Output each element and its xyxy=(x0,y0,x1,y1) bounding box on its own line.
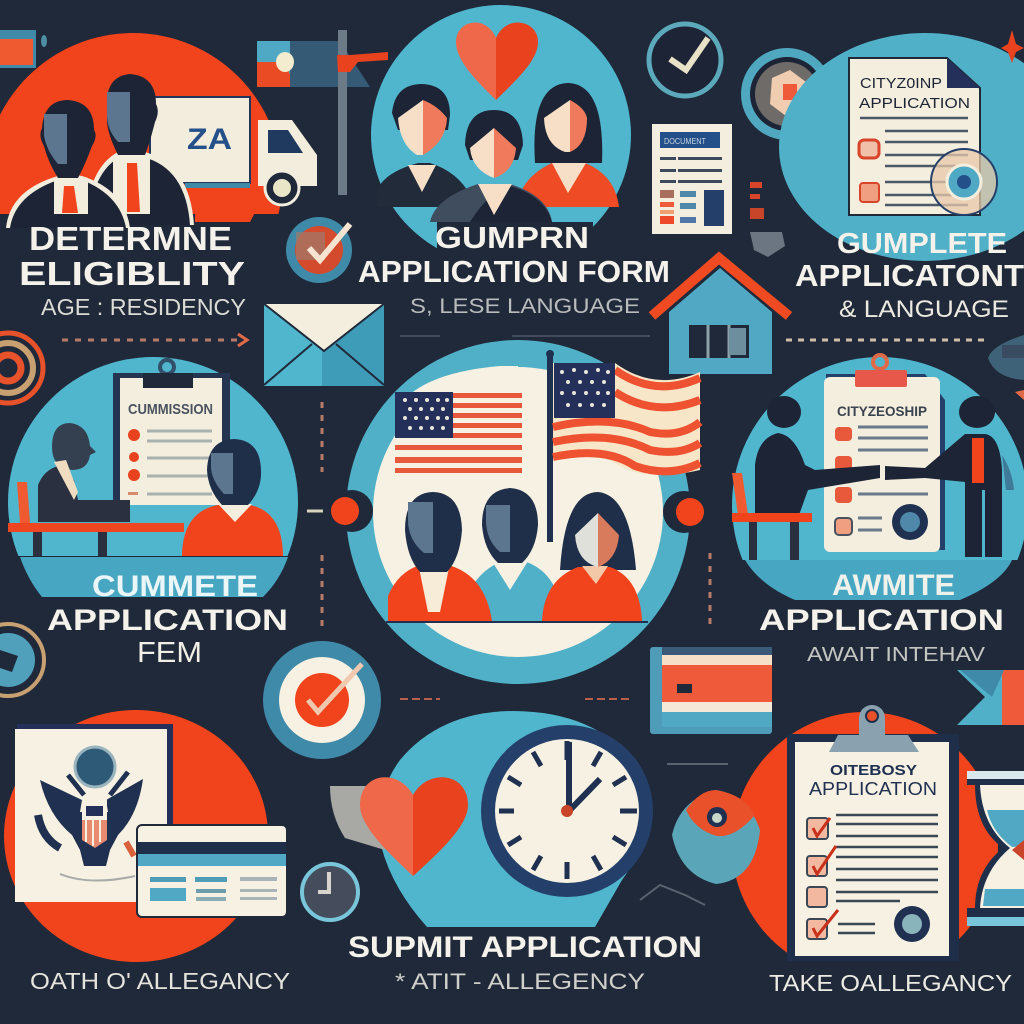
heading: submit application: SUPMIT APPLICATION xyxy=(348,931,702,964)
icon: person right xyxy=(517,83,619,207)
panel: await application xyxy=(720,355,1024,700)
icon: citizen centre xyxy=(470,488,556,621)
icon: clipboard xyxy=(787,705,959,961)
icon: seated official xyxy=(38,423,130,522)
icon: waving flag xyxy=(546,350,700,542)
icon: key and flag xyxy=(257,30,388,195)
icon: node left xyxy=(331,490,373,532)
icon: approved check badge xyxy=(286,217,352,283)
heading: awmite: AWMITE xyxy=(832,569,955,602)
icon: right side bust xyxy=(988,335,1024,400)
panel: complete application circle xyxy=(779,30,1024,323)
panel: take oath xyxy=(672,705,1024,996)
icon: person shaking hands right xyxy=(885,396,1014,557)
heading: gumprn: GUMPRN xyxy=(435,220,589,255)
icon: round stamp xyxy=(741,48,833,140)
arrows: dashed connectors xyxy=(62,334,985,699)
icon: smear xyxy=(330,786,385,850)
icon: id card xyxy=(650,647,772,734)
icon: small marks xyxy=(750,182,785,257)
icon: small clock badge xyxy=(302,864,358,920)
icon: person left xyxy=(377,84,470,207)
caption: AGE : RESIDENCY xyxy=(41,294,246,320)
icon: clipboard: OITEBOSY xyxy=(830,762,917,779)
heading line 2: APPLICATONT xyxy=(795,258,1024,293)
icon: left partial badge xyxy=(0,624,44,696)
panel: central flag and citizens xyxy=(346,340,700,684)
icon: bank card xyxy=(137,825,287,917)
panel: complete application form xyxy=(0,357,310,700)
icon: corner ticket xyxy=(0,30,47,68)
panel: determine eligibility xyxy=(0,33,317,331)
caption: * ATIT - ALLEGENCY xyxy=(395,969,645,994)
caption: S, LESE LANGUAGE xyxy=(410,295,640,318)
icon: two officials xyxy=(6,74,194,228)
icon: location pin xyxy=(672,790,760,884)
panel: application form circle xyxy=(358,5,670,318)
icon: star xyxy=(1001,30,1024,63)
icon: citizen right xyxy=(542,492,642,621)
icon: clock xyxy=(481,725,653,897)
caption: oath of allegiance: OATH O' ALLEGANCY xyxy=(30,968,290,994)
icon: sketch marks xyxy=(640,764,728,905)
icon: left target xyxy=(0,333,43,403)
icon: chair xyxy=(732,473,812,522)
icon: node right xyxy=(663,491,705,533)
heading: cummete: CUMMETE xyxy=(92,570,258,603)
icon: clipboard xyxy=(113,360,230,505)
icon: person centre xyxy=(430,110,552,222)
heading line 2: ELIGIBLITY xyxy=(19,255,245,292)
icon: document xyxy=(652,124,732,234)
icon: small flag xyxy=(395,392,522,473)
caption: take oath: TAKE OALLEGANCY xyxy=(769,970,1012,996)
caption: AWAIT INTEHAV xyxy=(807,644,986,666)
icon: seated applicant xyxy=(182,439,283,557)
icon: seal document xyxy=(15,724,173,902)
icon: hourglass xyxy=(967,771,1024,926)
icon: envelope xyxy=(263,303,385,386)
caption: & LANGUAGE xyxy=(839,296,1009,323)
heading line 2: APPLICATION xyxy=(47,604,288,637)
icon: delivery truck: ZA xyxy=(187,123,232,156)
icon: citizen left xyxy=(388,492,492,621)
icon: clipboard: CUMMISSION xyxy=(128,401,213,418)
icon: right envelope xyxy=(957,670,1024,725)
heading: gumplete: GUMPLETE xyxy=(837,228,1007,260)
icon: desk xyxy=(8,482,184,557)
panel: submit application xyxy=(302,711,702,994)
icon: delivery truck xyxy=(150,97,317,205)
heading line 2: APPLICATION FORM xyxy=(358,254,670,289)
icon: checklist document: APPLICATION xyxy=(859,95,970,112)
icon: clipboard: APPLICATION xyxy=(809,779,937,799)
icon: clipboard: CITYZEOSHIP xyxy=(837,403,927,419)
icon: heart xyxy=(456,23,538,100)
icon: house xyxy=(652,258,789,374)
icon: seal xyxy=(931,149,997,215)
caption: FEM xyxy=(137,637,202,669)
icon: person shaking hands left xyxy=(749,396,880,560)
icon: clipboard xyxy=(824,355,945,552)
heading line 2: APPLICATION xyxy=(759,604,1004,637)
icon: checklist document: CITYZ0INP xyxy=(860,75,942,92)
icon: heart xyxy=(360,777,468,876)
icon: check badge xyxy=(649,24,721,96)
icon: document: DOCUMENT xyxy=(664,137,706,146)
heading: determine: DETERMNE xyxy=(29,220,232,257)
icon: approval check circle xyxy=(263,641,381,759)
icon: checklist document xyxy=(849,58,980,215)
panel: oath of allegiance xyxy=(4,710,290,994)
